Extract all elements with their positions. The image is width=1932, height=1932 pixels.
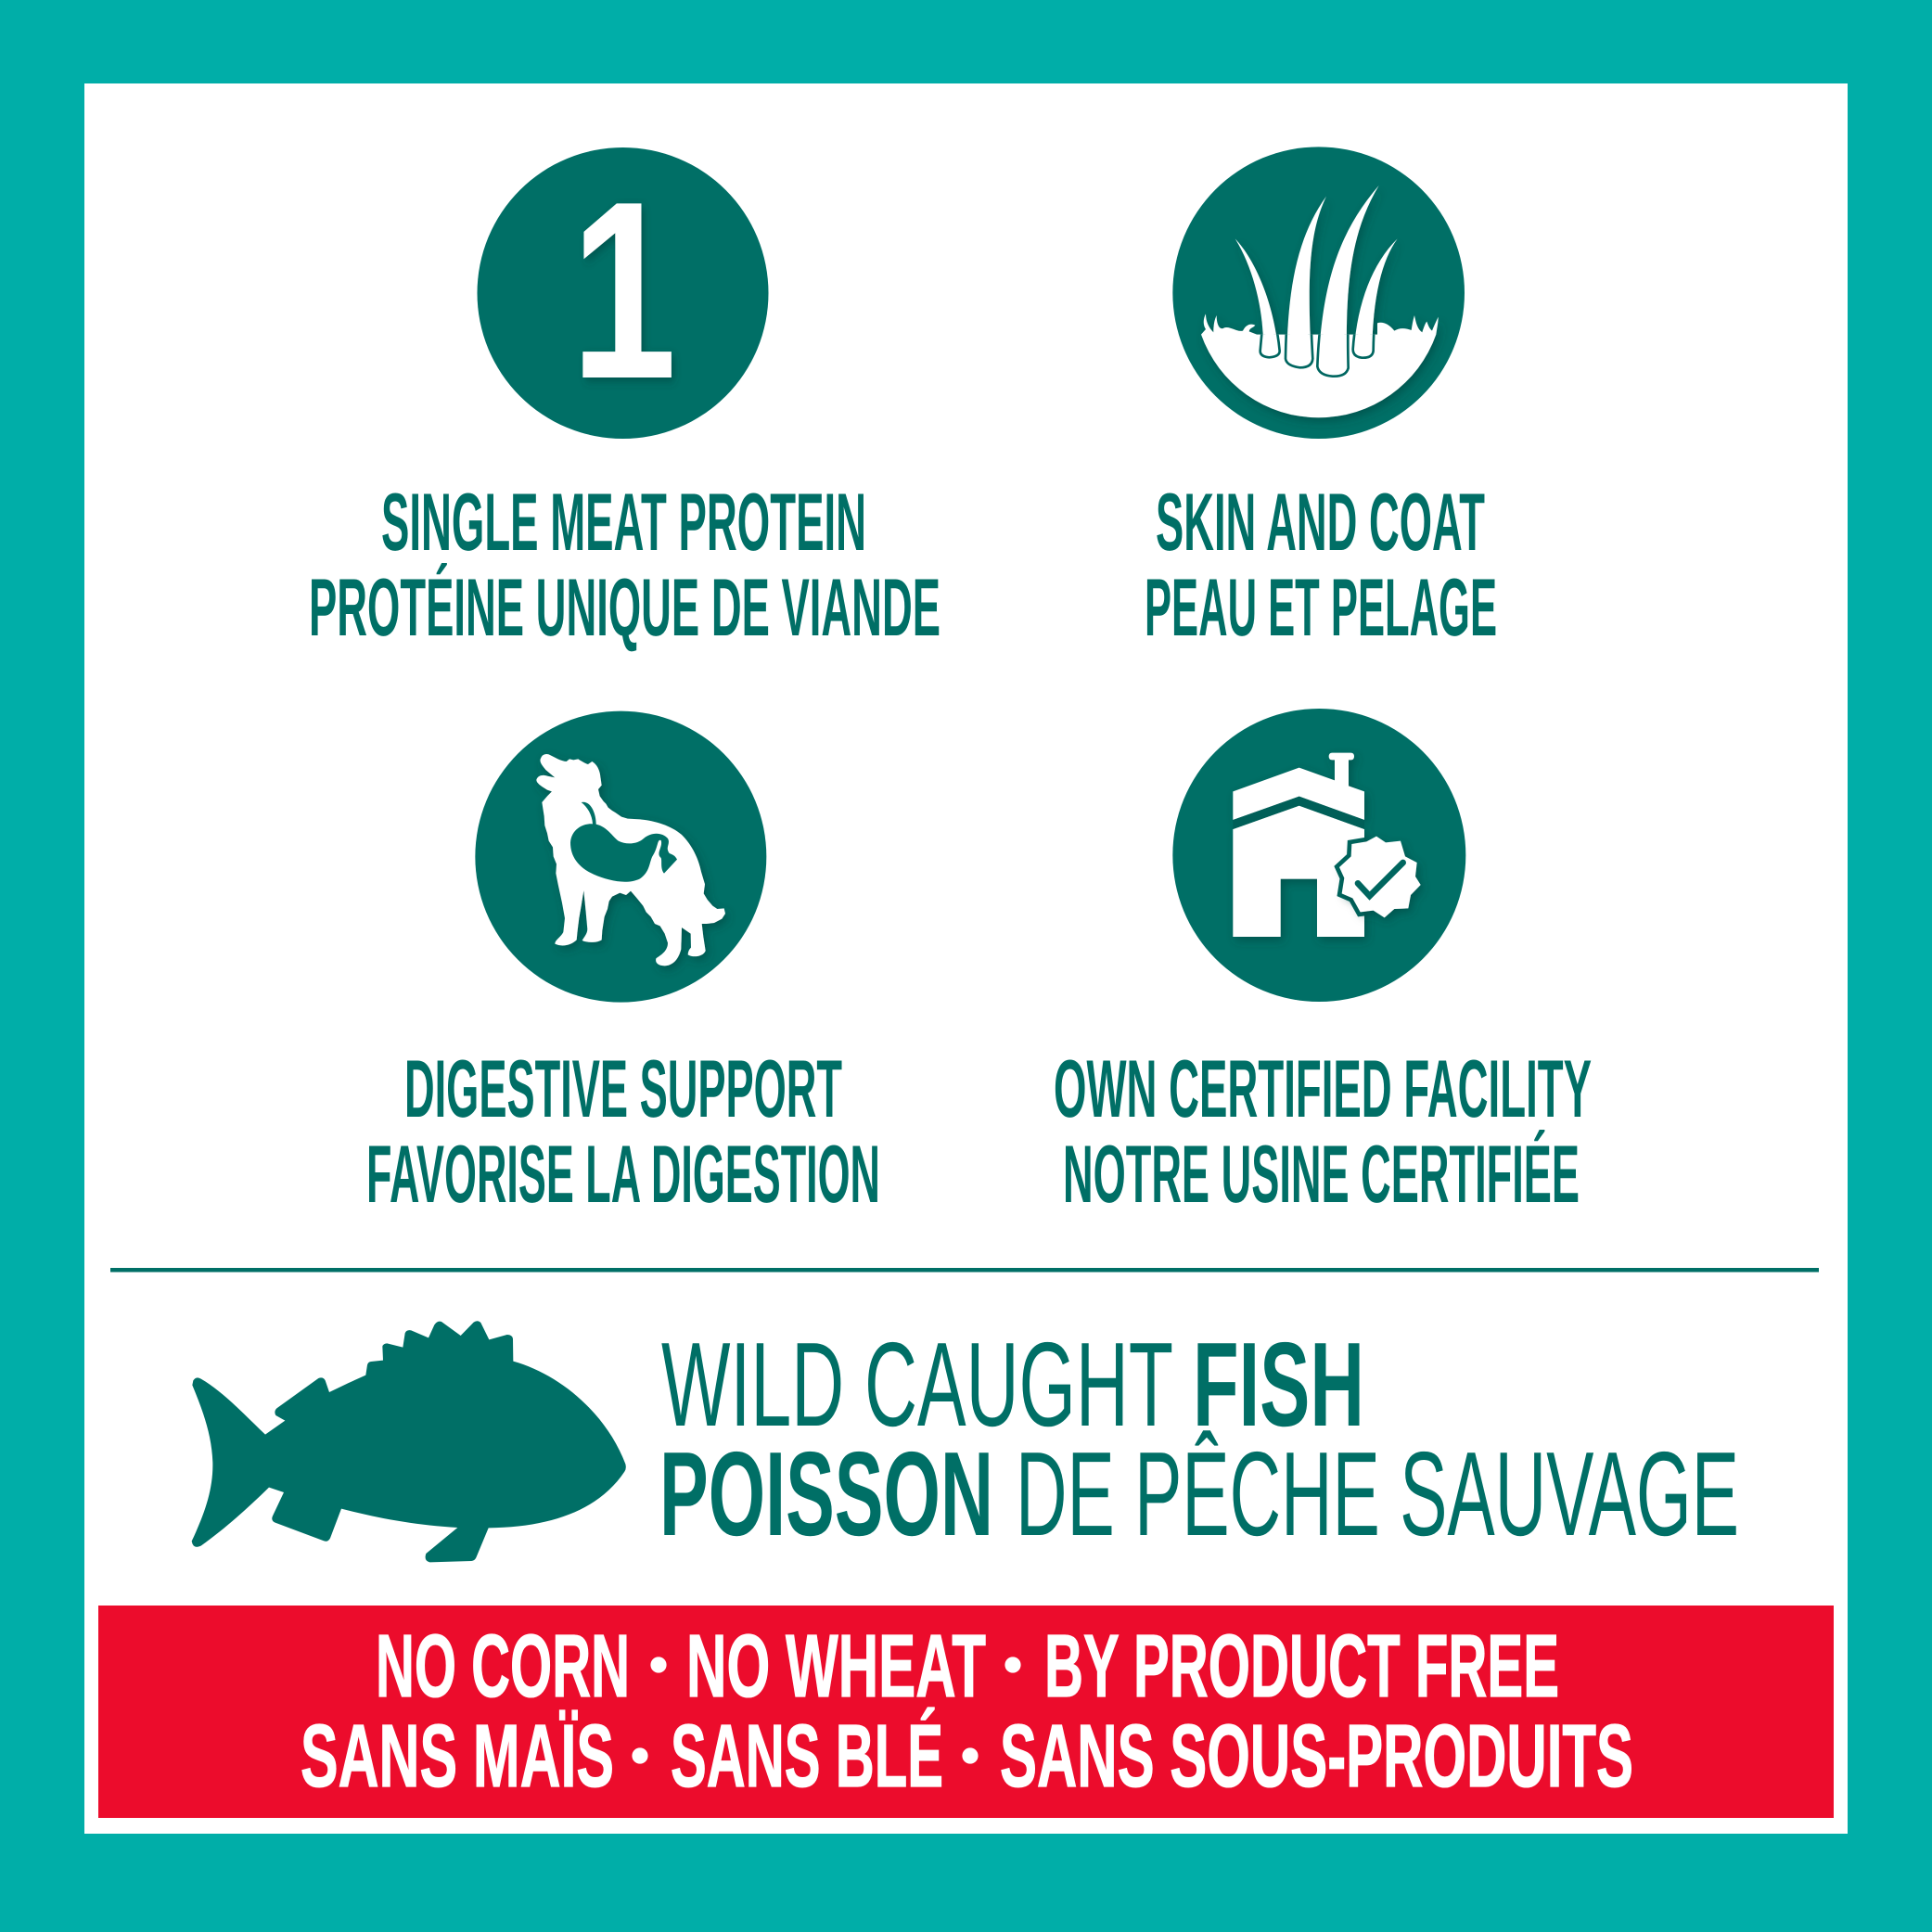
- label: digestive support: [366, 1043, 880, 1220]
- icon: fish: [192, 1321, 626, 1562]
- label: skin and coat: SKIN AND COAT: [1156, 476, 1485, 568]
- icon: certified facility house: [1172, 709, 1465, 1002]
- headline: wild caught fish: [659, 1318, 1739, 1561]
- icon: dog digestive: [475, 711, 766, 1003]
- headline: wild caught fish: FISH: [1193, 1318, 1364, 1452]
- banner text: SANS BLÉ: [671, 1707, 943, 1806]
- banner text: [301, 1617, 1633, 1806]
- banner text: NO WHEAT: [686, 1617, 986, 1716]
- badge with check mark: [1339, 837, 1421, 917]
- icon: number one: 1: [570, 150, 677, 432]
- banner text: BY PRODUCT FREE: [1044, 1617, 1559, 1716]
- banner text: SANS MAÏS: [301, 1707, 614, 1806]
- headline: wild caught fish: WILD CAUGHT: [661, 1318, 1173, 1452]
- label: single meat protein: SINGLE MEAT PROTEIN: [381, 476, 866, 568]
- icon: skin and coat: [1172, 147, 1465, 439]
- label: single meat protein: PROTÉINE UNIQUE DE VIANDE: [309, 561, 940, 653]
- icon: number one: [477, 147, 768, 439]
- divider: [110, 1268, 1819, 1273]
- badge outline: [1334, 838, 1364, 916]
- label: own certified facility: [1054, 1043, 1592, 1220]
- infographic: PEAU ET PELAGE: [1145, 561, 1497, 653]
- headline: wild caught fish: POISSON: [659, 1427, 993, 1561]
- label: skin and coat: [1145, 476, 1497, 653]
- red banner: [98, 1606, 1834, 1818]
- label: digestive support: FAVORISE LA DIGESTION: [366, 1128, 880, 1220]
- label: digestive support: DIGESTIVE SUPPORT: [404, 1043, 842, 1134]
- banner text: NO CORN: [376, 1617, 630, 1716]
- label: single meat protein: [309, 476, 940, 653]
